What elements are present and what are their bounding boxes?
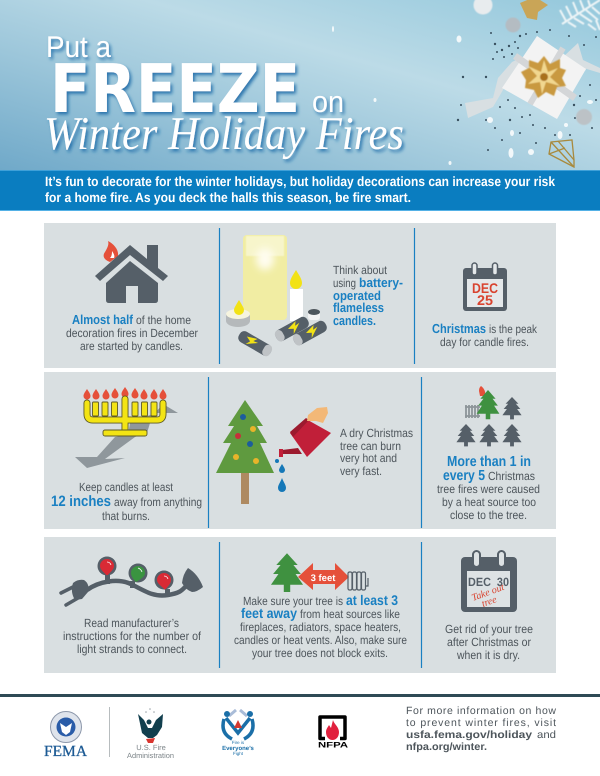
icon: calendar dec 30 xyxy=(461,551,517,612)
text: keep candles away xyxy=(51,480,202,523)
text: keep candles away: 12 inches xyxy=(51,493,111,510)
icon: calendar dec 30: DEC 30 xyxy=(468,575,509,589)
icon: calendar dec 25 xyxy=(463,263,507,311)
text: battery-operated candles: candles. xyxy=(333,313,376,328)
text: dry tree burns fast: A dry Christmas xyxy=(340,426,413,440)
icon: string of lights xyxy=(61,556,203,605)
logo: U.S. Fire Administration xyxy=(127,708,174,760)
title: Put a xyxy=(46,31,111,64)
text: battery-operated candles: using xyxy=(333,276,356,290)
icon: trees and heat source xyxy=(456,386,522,446)
icon: calendar dec 25: 25 xyxy=(477,292,493,308)
text: get rid of tree: Get rid of your tree xyxy=(445,622,533,636)
text: christmas peak: is the peak xyxy=(489,322,537,336)
icon: silver ball xyxy=(474,0,492,14)
icon: silver ornament lower xyxy=(576,109,592,125)
footer rule xyxy=(0,694,600,697)
title xyxy=(44,31,404,160)
text: three feet away: Make sure your tree is xyxy=(243,594,343,608)
text: manufacturer instructions: instructions for the number of xyxy=(63,629,202,643)
icon: calendar dec 25: DEC xyxy=(472,280,498,296)
panel: row 3 xyxy=(44,537,556,673)
text: more than 1 in 5: tree fires were caused xyxy=(437,482,540,496)
icon: silver ornament xyxy=(506,18,520,32)
text: more than 1 in 5: More than 1 in xyxy=(447,454,531,470)
logo: FEMA: FEMA xyxy=(44,743,88,760)
text: three feet away xyxy=(234,592,407,660)
text: more information: and xyxy=(537,729,556,741)
icon: gold bow xyxy=(521,56,566,98)
logo: NFPA: NFPA xyxy=(318,740,348,750)
icon: house on fire xyxy=(95,241,168,303)
text: more than 1 in 5: every 5 xyxy=(443,468,485,484)
text: three feet away: your tree does not block exits. xyxy=(252,646,388,660)
intro band xyxy=(0,170,600,211)
text: more information: For more information on how xyxy=(406,705,556,717)
text: almost half xyxy=(66,312,198,353)
text: battery-operated candles: operated xyxy=(333,288,381,303)
text: battery-operated candles xyxy=(333,263,403,328)
text: three feet away: fireplaces, radiators, space heaters, xyxy=(240,620,401,634)
text: manufacturer instructions xyxy=(63,616,202,656)
logo: Fire is Everyone's Fight xyxy=(222,710,255,756)
logo: Fire is Everyone's Fight: Everyone’s xyxy=(222,745,255,752)
text: dry tree burns fast: very hot and xyxy=(340,451,397,465)
title: FREEZE xyxy=(50,50,300,128)
text: almost half: of the home xyxy=(136,313,191,327)
icon: menorah with shadow xyxy=(75,387,178,468)
logo: FEMA xyxy=(44,712,88,760)
text: more than 1 in 5 xyxy=(437,454,540,522)
icon: pine branch xyxy=(560,0,600,30)
logo: U.S. Fire Administration: U.S. Fire xyxy=(136,743,166,752)
text: more information xyxy=(406,705,556,753)
text: get rid of tree: when it is dry. xyxy=(456,648,520,662)
text: almost half: are started by candles. xyxy=(80,339,183,353)
icon: ribbon xyxy=(465,43,600,118)
icon: calendar dec 30: tree xyxy=(480,594,499,610)
logo: NFPA xyxy=(318,717,348,750)
text: keep candles away: that burns. xyxy=(102,509,150,523)
text: almost half: decoration fires in December xyxy=(66,326,198,340)
title: Winter Holiday Fires xyxy=(44,108,404,160)
panel: row 1 xyxy=(44,223,556,368)
text: christmas peak xyxy=(432,321,537,349)
icon: gift box xyxy=(502,36,586,119)
text: keep candles away: Keep candles at least xyxy=(79,480,174,494)
text: three feet away: from heat sources like xyxy=(300,607,400,621)
intro band: for a home fire. As you deck the halls this season, be fire smart. xyxy=(45,190,411,205)
icon: geometric gold ornament xyxy=(549,140,574,167)
text: three feet away: feet away xyxy=(241,605,297,621)
text: more information: to prevent winter fires, visit xyxy=(406,717,556,729)
icon: tree, 3 feet arrow, radiator: 3 feet xyxy=(311,573,336,584)
text: dry tree burns fast xyxy=(340,426,413,478)
header photo banner xyxy=(0,0,600,170)
icon: watering can with hand xyxy=(275,407,331,492)
icon: tree, 3 feet arrow, radiator xyxy=(271,553,368,592)
divider xyxy=(109,707,110,757)
text: three feet away: at least 3 xyxy=(346,592,398,608)
icon: gold star xyxy=(520,0,548,20)
text: keep candles away: away from anything xyxy=(114,495,202,509)
panel: row 2 xyxy=(44,372,556,529)
icon: calendar dec 30: Take out xyxy=(470,582,506,604)
text: more than 1 in 5: by a heat source too xyxy=(442,495,536,509)
text: get rid of tree xyxy=(445,622,533,662)
text: almost half: Almost half xyxy=(72,312,134,327)
text: christmas peak: day for candle fires. xyxy=(440,335,529,349)
text: get rid of tree: after Christmas or xyxy=(447,635,531,649)
text: battery-operated candles: battery- xyxy=(359,275,403,290)
text: more information: usfa.fema.gov/holiday xyxy=(406,729,532,741)
logo: U.S. Fire Administration: Administration xyxy=(127,751,174,760)
text: battery-operated candles: Think about xyxy=(333,263,388,277)
text: more than 1 in 5: Christmas xyxy=(488,469,535,483)
icon: flameless candles and batteries xyxy=(226,235,329,358)
logo: Fire is Everyone's Fight: Fire is xyxy=(232,740,245,745)
text: manufacturer instructions: light strands to connect. xyxy=(77,642,187,656)
text: dry tree burns fast: very fast. xyxy=(340,464,382,478)
white snow flecks xyxy=(332,26,593,165)
text: christmas peak: Christmas xyxy=(432,321,486,336)
logo: Fire is Everyone's Fight: Fight xyxy=(233,751,244,756)
text: more information: nfpa.org/winter. xyxy=(406,741,487,753)
text: dry tree burns fast: tree can burn xyxy=(340,439,401,453)
text: more than 1 in 5: close to the tree. xyxy=(450,508,527,522)
text: battery-operated candles: flameless xyxy=(333,300,384,315)
title: on xyxy=(312,86,344,119)
icon: christmas tree xyxy=(216,400,274,504)
text: three feet away: candles or heat vents. Also, make sure xyxy=(234,633,407,647)
text: manufacturer instructions: Read manufacturer’s xyxy=(84,616,179,630)
confetti dots xyxy=(457,29,597,151)
